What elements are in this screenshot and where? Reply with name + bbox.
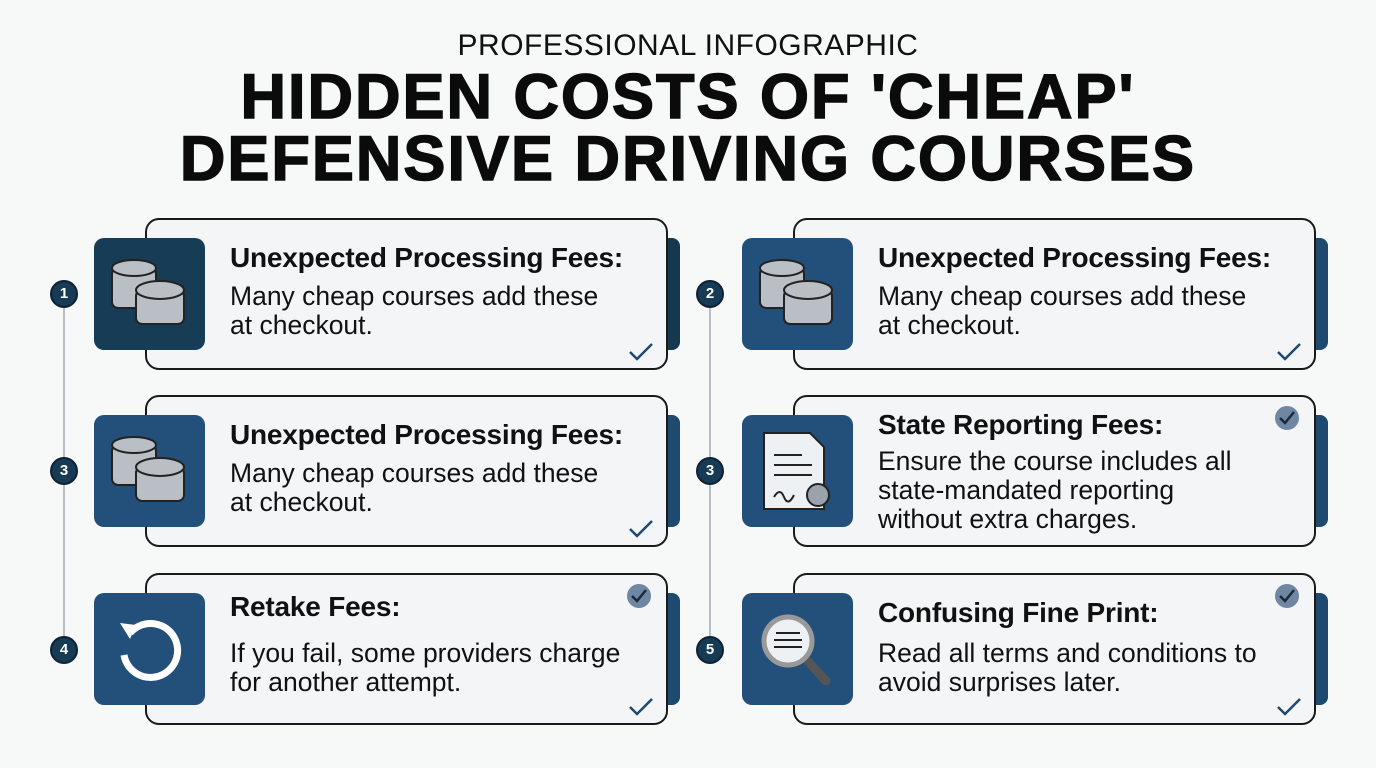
- number 5: 5: [706, 641, 714, 658]
- number 3 left: 3: [60, 462, 68, 479]
- title: HIDDEN COSTS OF 'CHEAP': [240, 62, 1136, 132]
- number 1: [50, 280, 78, 308]
- card 3 right: state-mandated reporting: [878, 475, 1174, 505]
- icon: retry arrow: [94, 593, 205, 705]
- card 2: at checkout.: [878, 310, 1021, 340]
- subtitle: PROFESSIONAL INFOGRAPHIC: [458, 29, 918, 62]
- card 4: Retake Fees:: [230, 591, 400, 622]
- card 1: [94, 218, 680, 370]
- card 3 right: Ensure the course includes all: [878, 446, 1232, 476]
- icon: magnifier: [742, 593, 853, 705]
- title: DEFENSIVE DRIVING COURSES: [180, 124, 1196, 194]
- card 1: Many cheap courses add these: [230, 281, 598, 311]
- card 3 right: without extra charges.: [878, 504, 1137, 534]
- number 5: [696, 636, 724, 664]
- card 1: Unexpected Processing Fees:: [230, 242, 623, 273]
- title: [180, 62, 1196, 194]
- card 4: for another attempt.: [230, 667, 461, 697]
- card 5: Confusing Fine Print:: [878, 597, 1158, 628]
- card 3 left: [94, 395, 680, 547]
- number 3 right: [696, 457, 724, 485]
- card 3 right: [742, 395, 1328, 547]
- card 4: [94, 573, 680, 725]
- card 5: Read all terms and conditions to: [878, 638, 1257, 668]
- card 3 right: State Reporting Fees:: [878, 409, 1163, 440]
- card 2: Unexpected Processing Fees:: [878, 242, 1271, 273]
- number 3 right: 3: [706, 462, 714, 479]
- card 5: avoid surprises later.: [878, 667, 1121, 697]
- number 4: 4: [60, 641, 68, 658]
- card 2: Many cheap courses add these: [878, 281, 1246, 311]
- number 2: 2: [706, 285, 714, 302]
- icon: coins: [94, 415, 205, 527]
- card 3 left: Unexpected Processing Fees:: [230, 419, 623, 450]
- number 3 left: [50, 457, 78, 485]
- card 3 left: Many cheap courses add these: [230, 458, 598, 488]
- card 4: If you fail, some providers charge: [230, 638, 620, 668]
- card 3 left: at checkout.: [230, 487, 373, 517]
- card 1: at checkout.: [230, 310, 373, 340]
- card 5: [742, 573, 1328, 725]
- right connector line: [709, 305, 711, 640]
- number 1: 1: [60, 285, 68, 302]
- number 4: [50, 636, 78, 664]
- number 2: [696, 280, 724, 308]
- icon: coins: [94, 238, 205, 350]
- card 2: [742, 218, 1328, 370]
- icon: document: [742, 415, 853, 527]
- left connector line: [63, 305, 65, 640]
- icon: coins: [742, 238, 853, 350]
